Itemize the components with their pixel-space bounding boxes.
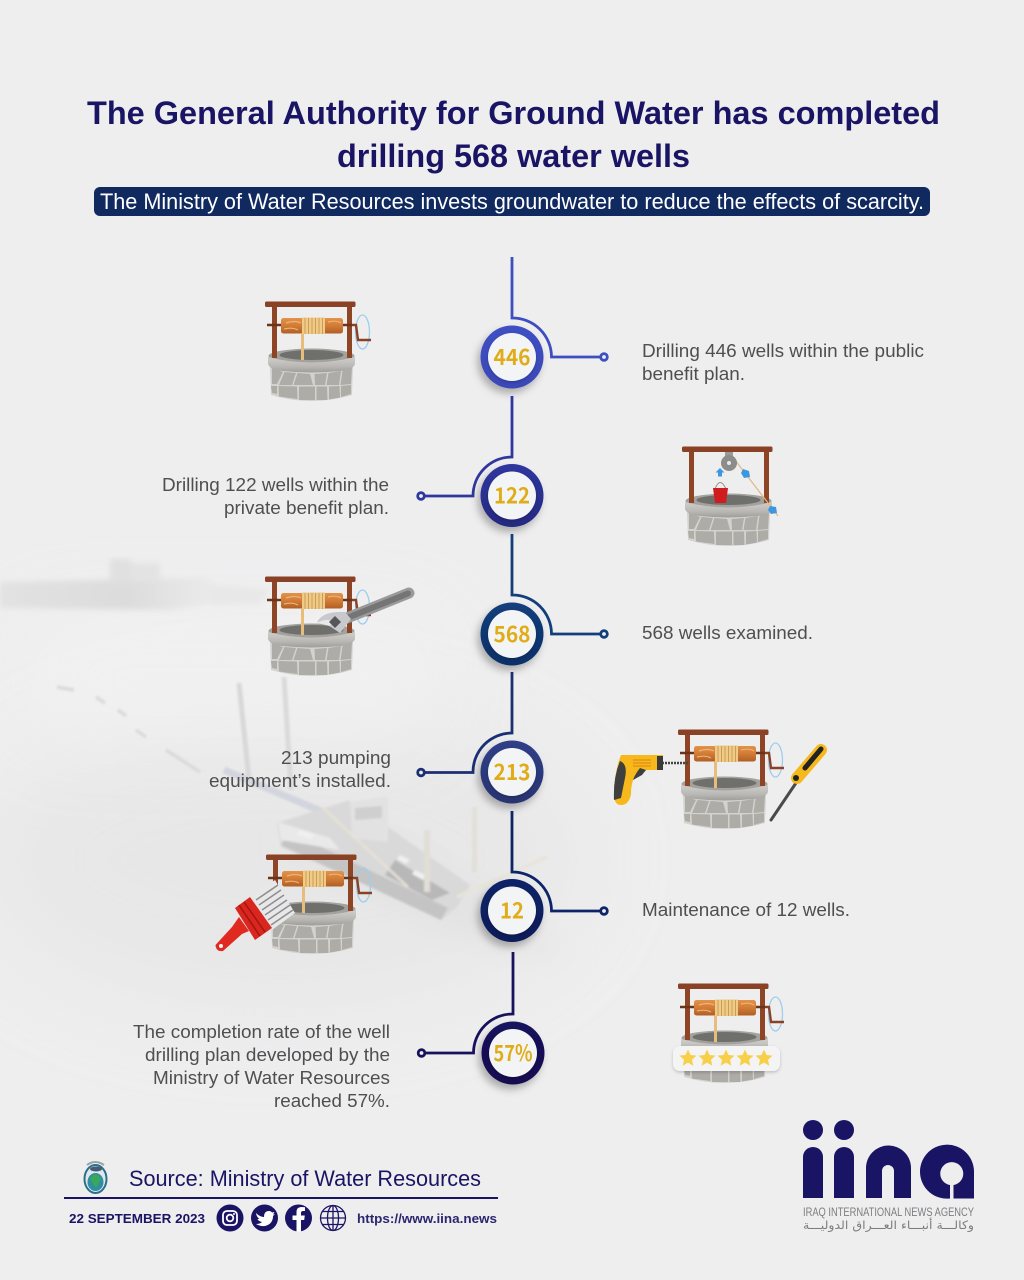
logo: iina: IRAQ INTERNATIONAL NEWS AGENCY: [803, 1205, 974, 1219]
website: https://www.iina.news: [357, 1211, 497, 1226]
source line: Source: Ministry of Water Resources: [129, 1166, 481, 1191]
text: completion rate: reached 57%.: [274, 1090, 390, 1111]
timeline node: 57%: [418, 952, 544, 1084]
text: maintenance: Maintenance of 12 wells.: [642, 899, 850, 920]
timeline node: 568: [480, 534, 607, 666]
icon: well with star rating: [673, 984, 784, 1083]
icon: twitter: [251, 1204, 278, 1232]
icon: facebook: [285, 1204, 312, 1232]
title: [87, 95, 940, 174]
text: completion rate: [133, 1021, 390, 1111]
text: 446 wells: benefit plan.: [642, 363, 745, 384]
icon: well with pulley and bucket: [682, 446, 778, 546]
text: completion rate: The completion rate of the well: [133, 1021, 390, 1042]
timeline node: 122: [418, 396, 544, 527]
logo: iina: وكالـــة أنبـــاء العـــراق الدوليـــة: [803, 1217, 974, 1233]
date: 22 SEPTEMBER 2023: [69, 1212, 205, 1226]
timeline node: 57%: 57%: [494, 1036, 532, 1068]
timeline node: 213: [418, 672, 544, 804]
timeline node: 446: [480, 257, 607, 388]
timeline node: 213: 213: [494, 755, 530, 787]
icon: well with wrench: [265, 576, 409, 676]
text: 122 wells: [162, 474, 389, 518]
icon: well with paint brush: [216, 854, 372, 954]
timeline node: 12: [480, 811, 607, 942]
logo: iina: [803, 1120, 974, 1233]
subtitle banner: The Ministry of Water Resources invests groundwater to reduce the effects of scarcity.: [100, 189, 924, 214]
text: 122 wells: private benefit plan.: [224, 497, 389, 518]
icon: well with drill and screwdriver: [614, 730, 821, 829]
timeline node: 446: 446: [494, 340, 531, 372]
icon: globe: [320, 1206, 346, 1230]
text: completion rate: drilling plan developed by the: [145, 1044, 390, 1065]
title: The General Authority for Ground Water has completed: [87, 95, 940, 131]
timeline node: 568: 568: [494, 617, 530, 649]
text: 446 wells: Drilling 446 wells within the public: [642, 340, 924, 361]
text: 122 wells: Drilling 122 wells within the: [162, 474, 389, 495]
text: 446 wells: [642, 340, 924, 384]
timeline node: 12: 12: [500, 894, 524, 926]
icon: ministry emblem: [84, 1162, 106, 1193]
title: drilling 568 water wells: [337, 138, 690, 174]
footer rule: [64, 1197, 498, 1199]
text: 213 pumping: 213 pumping: [281, 747, 391, 768]
text: 213 pumping: equipment’s installed.: [209, 770, 391, 791]
text: 213 pumping: [209, 747, 391, 791]
icon: well with winch: [265, 302, 371, 401]
icon: instagram: [216, 1204, 244, 1232]
text: completion rate: Ministry of Water Resources: [153, 1067, 390, 1088]
text: 568 examined: 568 wells examined.: [642, 622, 813, 643]
timeline node: 122: 122: [494, 478, 530, 510]
